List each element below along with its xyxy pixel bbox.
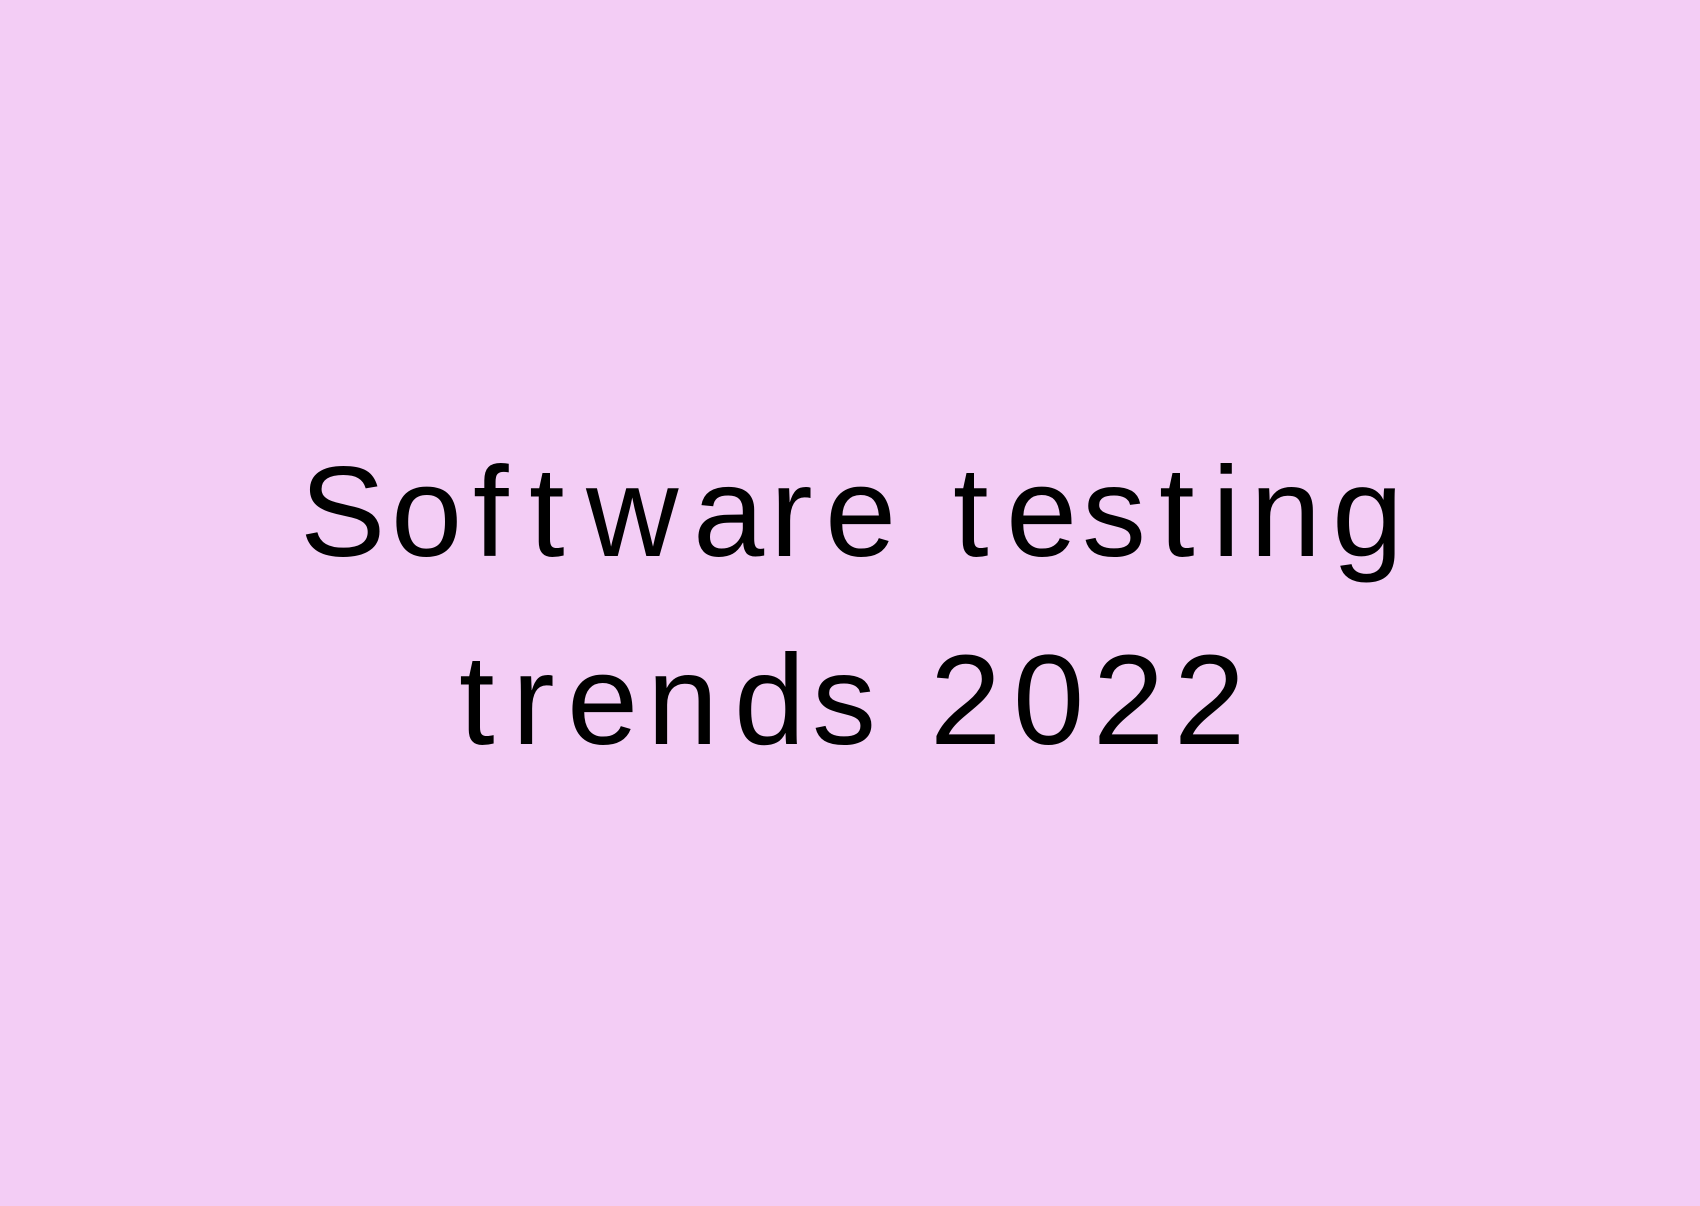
- title line 1: Software testing: [300, 441, 1403, 584]
- title line 2: trends 2022: [459, 629, 1245, 772]
- title: [300, 441, 1403, 772]
